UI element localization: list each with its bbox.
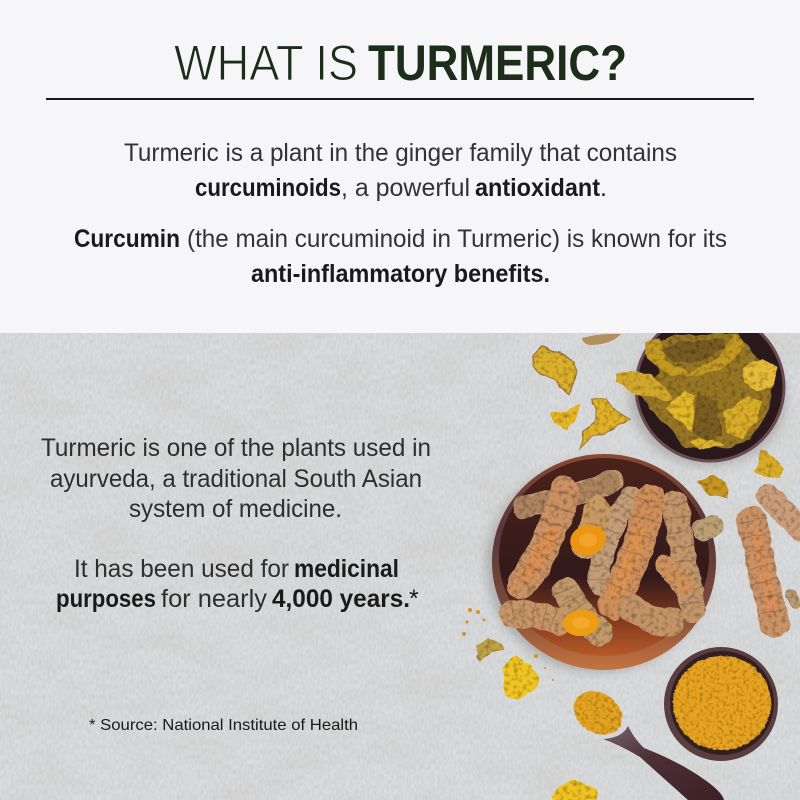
source note: * Source: National Institute of Health bbox=[89, 717, 358, 734]
icon: dried turmeric slices bbox=[475, 345, 783, 800]
intro text block bbox=[74, 139, 727, 288]
icon: bowl of turmeric powder bbox=[664, 647, 778, 761]
intro text block: , a powerful bbox=[341, 174, 470, 202]
body text block: for nearly bbox=[161, 585, 268, 613]
body text block: medicinal bbox=[294, 555, 399, 583]
title: TURMERIC? bbox=[368, 35, 627, 91]
intro text block: curcuminoids bbox=[195, 174, 341, 202]
body text block: ayurveda, a traditional South Asian bbox=[50, 465, 422, 493]
icon: loose root piece at top bbox=[582, 334, 621, 345]
intro text block: Turmeric is a plant in the ginger family that contains bbox=[124, 139, 677, 167]
icon: bowl of dried turmeric bbox=[617, 313, 786, 466]
body text block: * bbox=[409, 585, 419, 613]
linen background photo bbox=[0, 333, 800, 800]
title underline bbox=[46, 98, 754, 100]
intro text block: . bbox=[600, 174, 607, 202]
cut root faces bbox=[567, 521, 609, 559]
body text block: 4,000 years. bbox=[272, 585, 410, 613]
body text block: Turmeric is one of the plants used in bbox=[41, 434, 431, 462]
intro text block: anti-inflammatory benefits. bbox=[251, 260, 550, 288]
scattered powder specks bbox=[462, 608, 554, 681]
body text block bbox=[41, 434, 431, 613]
title bbox=[174, 35, 627, 91]
top panel background bbox=[0, 0, 800, 333]
intro text block: Curcumin bbox=[74, 225, 180, 253]
icon: loose turmeric roots bbox=[752, 496, 800, 625]
intro text block: (the main curcuminoid in Turmeric) is known for its bbox=[187, 225, 727, 253]
body text block: purposes bbox=[56, 585, 156, 613]
body text block: It has been used for bbox=[74, 555, 289, 583]
icon: wooden spoon with powder bbox=[565, 682, 724, 800]
intro text block: antioxidant bbox=[475, 174, 601, 202]
root pieces bbox=[512, 481, 712, 633]
title: WHAT IS bbox=[174, 35, 358, 91]
body text block: system of medicine. bbox=[129, 495, 342, 523]
icon: wooden plate with turmeric roots bbox=[486, 454, 716, 672]
